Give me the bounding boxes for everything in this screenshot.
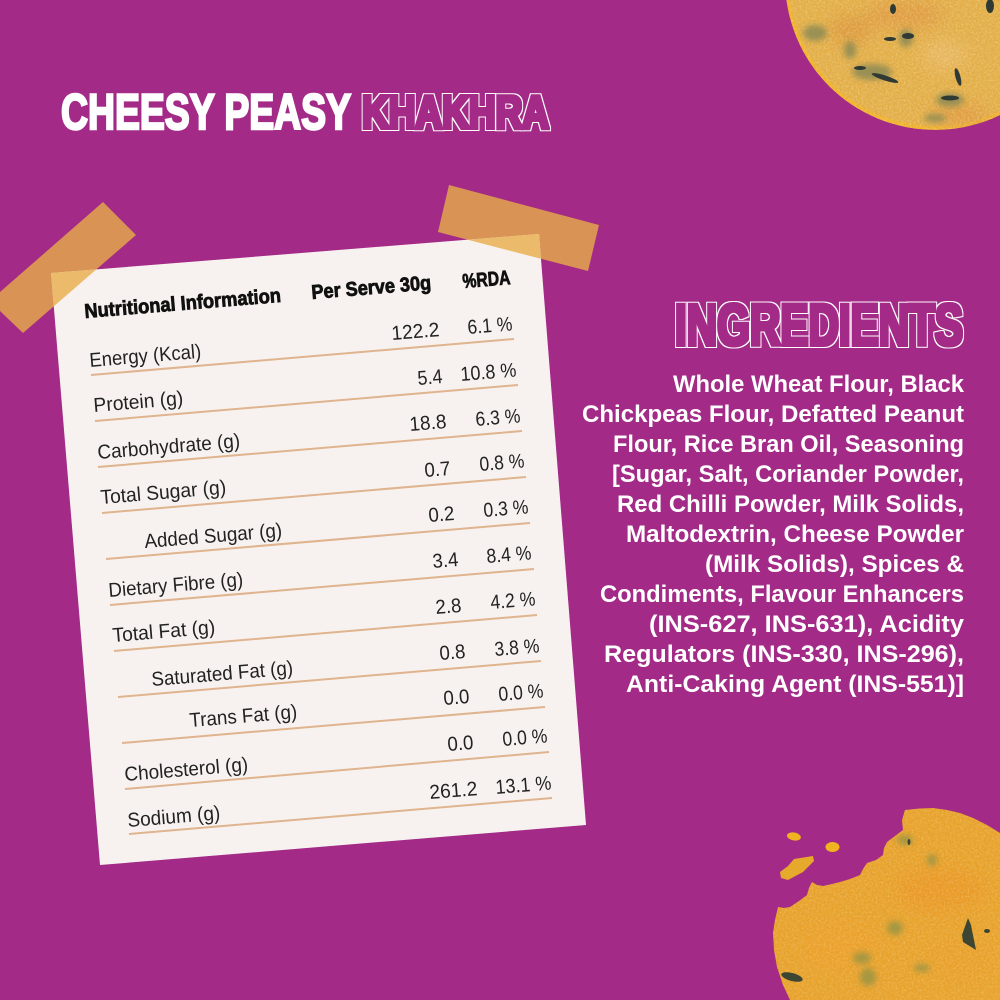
header: per serve: Per Serve 30g xyxy=(311,272,432,304)
row: energy: Energy (Kcal) xyxy=(89,341,202,372)
title xyxy=(61,84,549,140)
row: sodium: Sodium (g) xyxy=(127,802,221,832)
tape overlap on sheet xyxy=(51,234,541,306)
text block: ingredients list: Anti-Caking Agent (INS-551)] xyxy=(626,671,964,698)
row: total fat xyxy=(112,588,536,647)
row: carbohydrate: Carbohydrate (g) xyxy=(97,430,241,464)
image: bitten khakhra bottom right xyxy=(770,800,1000,1000)
row: added sugar: 0.2 xyxy=(428,503,455,527)
row: protein: 10.8 % xyxy=(460,359,517,386)
row: protein: 5.4 xyxy=(417,366,443,390)
row: total fat: 2.8 xyxy=(435,595,462,619)
row: sodium: 13.1 % xyxy=(495,772,552,799)
text block: ingredients list: Maltodextrin, Cheese Powder xyxy=(626,521,964,548)
row: saturated fat xyxy=(151,635,540,691)
row: carbohydrate: 6.3 % xyxy=(475,405,521,431)
row: sodium xyxy=(127,772,552,832)
row: added sugar: 0.3 % xyxy=(483,496,529,522)
text block: ingredients list: Red Chilli Powder, Milk Solids, xyxy=(617,491,964,518)
row: energy: 122.2 xyxy=(391,319,440,345)
table header xyxy=(84,267,511,323)
text block: ingredients list: (INS-627, INS-631), Acidity xyxy=(649,611,965,638)
row dividers xyxy=(91,339,552,834)
row: saturated fat: 0.8 xyxy=(439,641,466,665)
icon: crumb small left xyxy=(786,831,802,842)
text block: ingredients list: Chickpeas Flour, Defatted Peanut xyxy=(582,401,964,428)
image: khakhra top right xyxy=(780,0,1000,135)
row: total sugar: Total Sugar (g) xyxy=(100,477,227,509)
text block: ingredients list: Flour, Rice Bran Oil, Seasoning xyxy=(613,431,964,458)
panel: nutrition sheet xyxy=(51,234,586,865)
row: carbohydrate: 18.8 xyxy=(409,411,447,436)
icon: crumb large xyxy=(780,856,814,880)
row: cholesterol: Cholesterol (g) xyxy=(124,754,249,786)
title: khakhra outlined: KHAKHRA xyxy=(362,86,549,138)
row: protein xyxy=(93,359,517,417)
row: total sugar: 0.7 xyxy=(424,458,451,482)
row: added sugar: Added Sugar (g) xyxy=(144,520,283,553)
row: trans fat xyxy=(189,680,544,732)
row: carbohydrate xyxy=(97,405,521,464)
row: added sugar xyxy=(144,496,529,553)
row: protein: Protein (g) xyxy=(93,388,184,417)
row: trans fat: 0.0 % xyxy=(498,680,544,706)
text block: ingredients list: Regulators (INS-330, INS-296), xyxy=(604,641,964,668)
row: total fat: Total Fat (g) xyxy=(112,617,216,647)
header: rda: %RDA xyxy=(462,267,511,293)
row: total sugar xyxy=(100,450,525,509)
row: dietary fibre: 3.4 xyxy=(432,549,459,573)
tape: right behind sheet xyxy=(438,185,599,271)
row: dietary fibre: 8.4 % xyxy=(486,542,532,568)
row: cholesterol xyxy=(124,725,548,786)
row: cholesterol: 0.0 % xyxy=(502,725,548,751)
title: cheesy peasy: CHEESY PEASY xyxy=(61,84,351,140)
tape: left behind sheet xyxy=(0,202,136,333)
text block: ingredients list: Condiments, Flavour Enhancers xyxy=(600,581,964,608)
text block: ingredients list xyxy=(582,371,965,698)
row: energy xyxy=(89,313,513,372)
row: trans fat: Trans Fat (g) xyxy=(189,701,298,732)
row: total sugar: 0.8 % xyxy=(479,450,525,476)
row: total fat: 4.2 % xyxy=(490,588,536,614)
icon: crumb small right xyxy=(826,842,840,852)
text block: ingredients list: (Milk Solids), Spices & xyxy=(705,551,964,578)
row: energy: 6.1 % xyxy=(467,313,513,339)
row: cholesterol: 0.0 xyxy=(447,732,474,756)
row: saturated fat: 3.8 % xyxy=(494,635,540,661)
row: dietary fibre: Dietary Fibre (g) xyxy=(108,569,244,602)
row: dietary fibre xyxy=(108,542,532,602)
header: nutritional information: Nutritional Information xyxy=(84,285,282,323)
row: sodium: 261.2 xyxy=(429,778,478,804)
text block: ingredients list: Whole Wheat Flour, Black xyxy=(673,371,965,398)
row: saturated fat: Saturated Fat (g) xyxy=(151,657,294,691)
row: trans fat: 0.0 xyxy=(443,686,470,710)
text block: ingredients list: [Sugar, Salt, Coriander Powder, xyxy=(612,461,964,488)
